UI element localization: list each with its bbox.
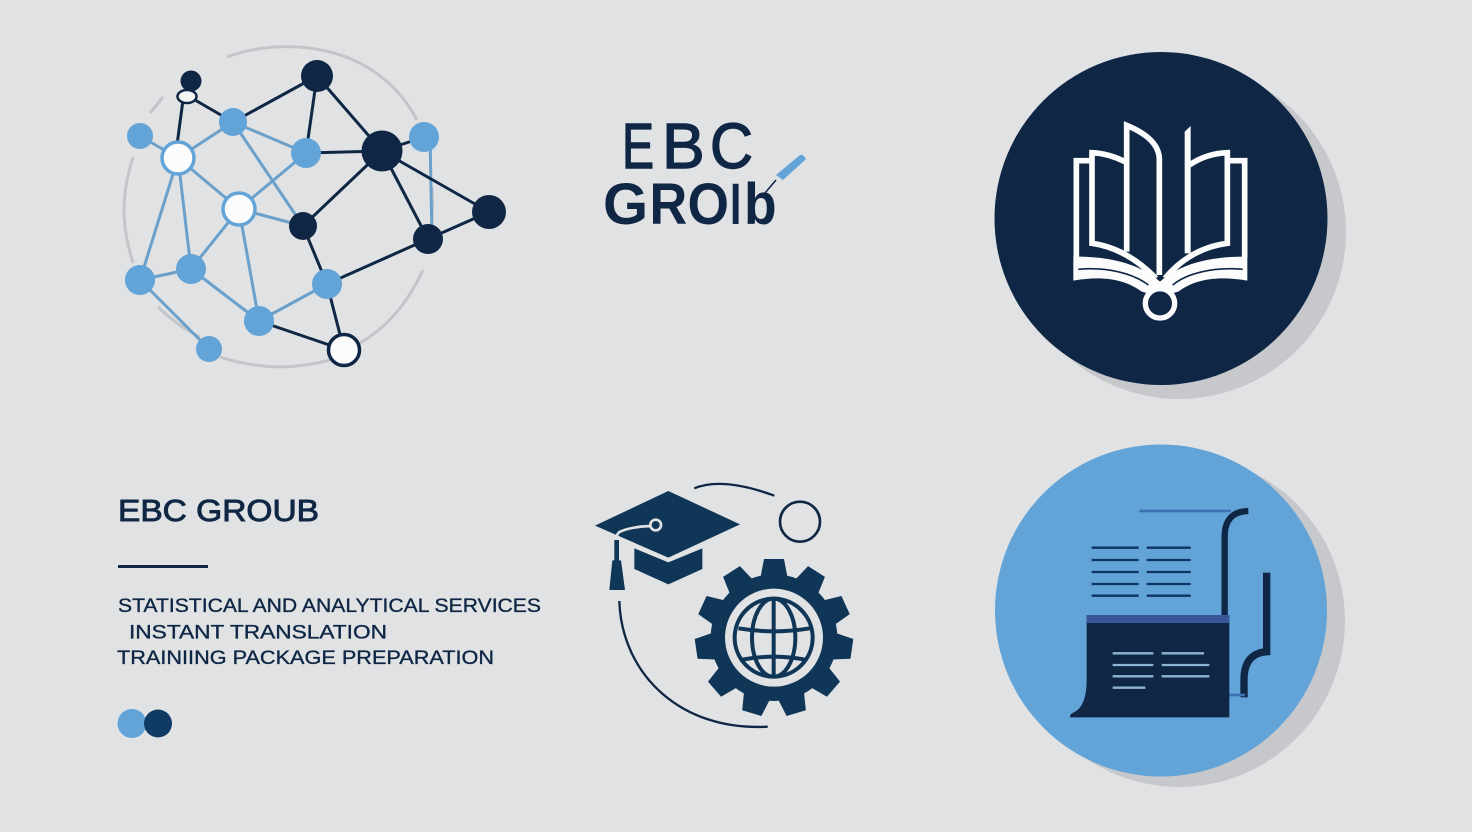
icon: open book	[1073, 125, 1247, 318]
document circle	[995, 444, 1345, 787]
logo: EBC GROIb: b	[744, 172, 777, 236]
heading: EBC GROUB: EBC GROUB	[118, 493, 319, 528]
logo: EBC GROIb: I	[730, 172, 741, 237]
legend dots	[118, 709, 172, 738]
service list: STATISTICAL AND ANALYTICAL SERVICES	[118, 595, 541, 617]
divider	[118, 565, 208, 568]
gear with globe	[694, 559, 854, 717]
graduation cap	[595, 491, 740, 590]
logo: EBC GROIb: B	[662, 110, 705, 182]
logo: EBC GROIb	[603, 110, 806, 237]
icon: pen	[765, 155, 806, 193]
icon: document	[1070, 510, 1267, 717]
network diagram	[124, 47, 506, 367]
arcs	[619, 484, 820, 727]
logo: EBC GROIb: G	[603, 172, 648, 237]
logo: EBC GROIb: O	[688, 172, 729, 236]
book circle	[994, 52, 1346, 399]
logo: EBC GROIb: C	[710, 111, 753, 182]
service list	[117, 595, 541, 669]
service list: TRAINIING PACKAGE PREPARATION	[117, 647, 494, 669]
logo: EBC GROIb: E	[622, 110, 654, 182]
icon: graduation cap and gear	[595, 484, 854, 727]
logo: EBC GROIb: R	[650, 171, 687, 237]
service list: INSTANT TRANSLATION	[129, 622, 387, 644]
